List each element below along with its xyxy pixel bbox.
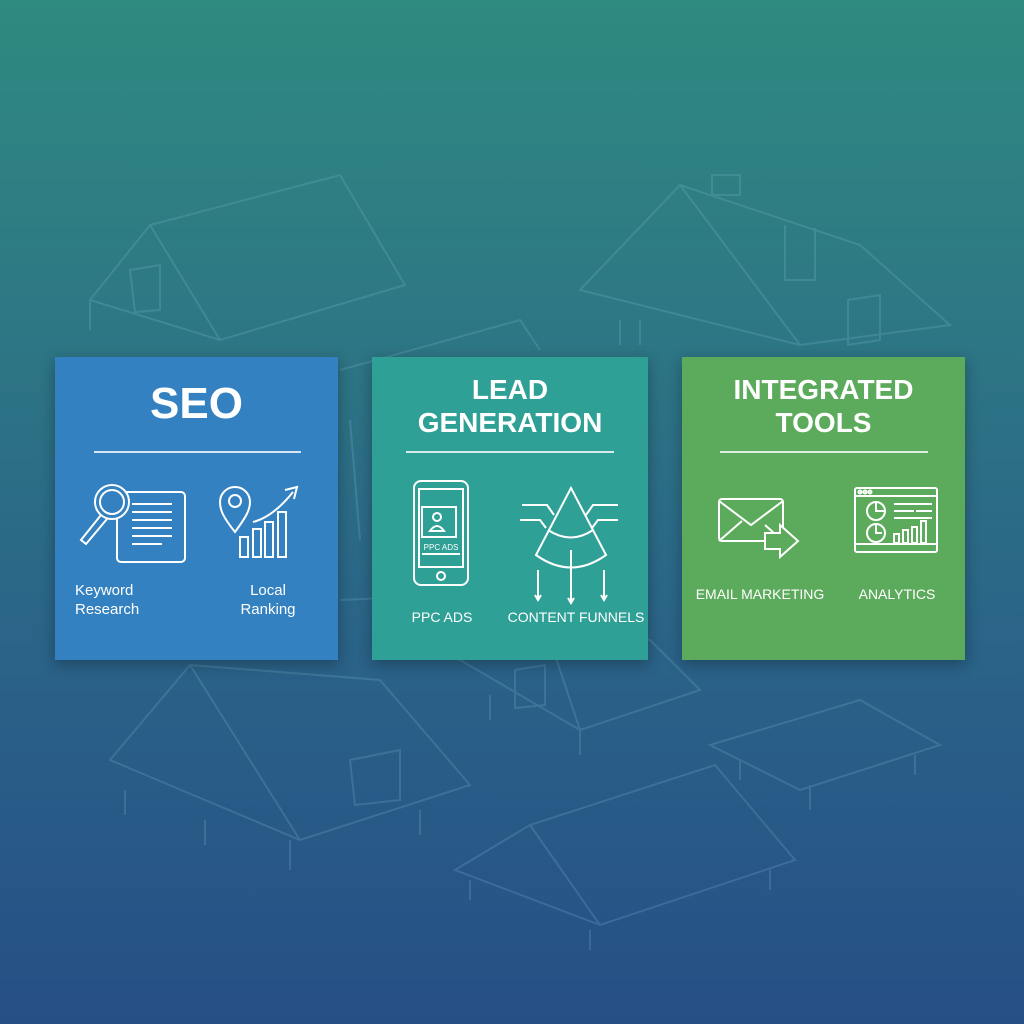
heading: integrated tools: TOOLS [776, 407, 871, 438]
label: keyword research [75, 582, 139, 618]
label: keyword research: Research [75, 601, 139, 618]
label: analytics: ANALYTICS [859, 586, 935, 602]
icon: email marketing [718, 498, 800, 559]
panel: lead generation [372, 357, 648, 660]
heading: integrated tools [734, 374, 913, 438]
label: local ranking: Local [250, 582, 286, 599]
panel: SEO [55, 357, 338, 660]
label: email marketing: EMAIL MARKETING [696, 586, 824, 602]
icon: phone PPC ads [413, 480, 469, 586]
label: content funnels: CONTENT FUNNELS [508, 609, 644, 625]
label: local ranking: Ranking [240, 601, 296, 618]
label: local ranking [240, 582, 296, 618]
heading: lead generation: GENERATION [418, 407, 602, 438]
heading: lead generation: LEAD [472, 374, 548, 405]
icon: keyword research [80, 484, 186, 563]
heading: SEO: SEO [150, 379, 243, 428]
icon: content funnel [520, 486, 618, 605]
icon: local ranking [219, 486, 298, 558]
icon: analytics dashboard [854, 487, 938, 553]
label: PPC ADS: PPC ADS [412, 609, 472, 625]
heading: integrated tools: INTEGRATED [734, 374, 913, 405]
heading: lead generation [418, 374, 602, 438]
panel: integrated tools [682, 357, 965, 660]
label: keyword research: Keyword [75, 582, 133, 599]
icon: phone PPC ads: PPC ADS [424, 543, 458, 552]
